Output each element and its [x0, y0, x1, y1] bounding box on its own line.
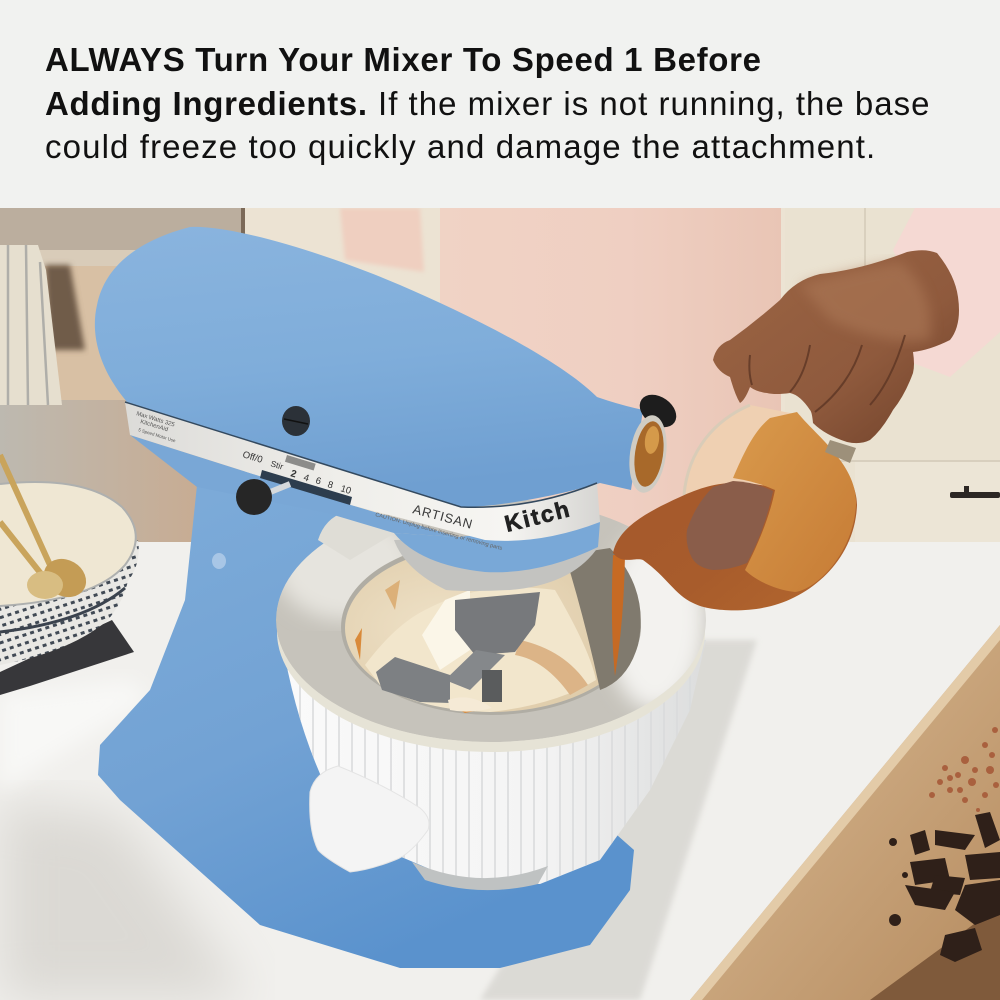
ice cream	[355, 580, 596, 713]
band text: speed labels: 10	[339, 483, 352, 497]
lower bowl	[0, 565, 129, 665]
instruction text	[45, 41, 930, 165]
kitchen background	[0, 208, 1000, 548]
gold spoons	[0, 455, 50, 575]
mixer planetary hub	[394, 522, 600, 591]
lock knob	[282, 406, 310, 436]
instruction text: Adding Ingredients. If the mixer is not running, the base	[45, 84, 930, 122]
caramel fill	[613, 420, 857, 610]
amber portion	[733, 412, 856, 592]
glass body	[684, 405, 850, 540]
rim shoulder behind the mixer head	[318, 512, 400, 560]
band text: capacity: KitchenAid	[139, 419, 169, 433]
band text: speed labels: 8	[326, 479, 334, 491]
glass spout ring	[825, 440, 856, 463]
person shirt	[340, 208, 781, 545]
band text: Artisan: ARTISAN	[411, 501, 475, 532]
band text: speed labels: 2	[289, 468, 298, 481]
chopped nuts	[929, 727, 999, 812]
slot for speed lever	[260, 470, 352, 505]
dark reflection	[687, 481, 773, 570]
bowl rim	[275, 498, 706, 752]
counter	[0, 542, 1000, 1000]
speed lever	[236, 479, 290, 515]
band text: capacity: 5 Speed Motor Use	[138, 427, 177, 443]
mat	[0, 620, 134, 695]
caramel stream	[612, 555, 625, 676]
header panel	[0, 0, 1000, 208]
mixer head	[95, 227, 643, 537]
towel	[0, 245, 62, 405]
band text: speed labels: 4	[302, 472, 310, 484]
speed control band	[125, 402, 600, 552]
mixer base	[98, 485, 634, 968]
instruction text: could freeze too quickly and damage the attachment.	[45, 128, 876, 165]
cutting board	[690, 625, 1000, 1000]
pitcher of caramel	[613, 405, 857, 610]
upper bowl	[0, 540, 139, 632]
mixer hub cap	[625, 388, 682, 495]
band text: speed labels: Off/0	[241, 449, 264, 466]
instruction text: ALWAYS Turn Your Mixer To Speed 1 Before	[45, 41, 762, 78]
dishes and spoons	[0, 455, 139, 695]
band text: caution: CAUTION: Unplug before inserting or removing parts	[374, 512, 503, 552]
ice cream bowl	[282, 640, 706, 890]
band text: capacity	[135, 411, 177, 443]
band text: capacity: Max Watts 325	[135, 411, 176, 429]
sleeve	[893, 208, 1000, 377]
band text: brand: Kitch	[502, 495, 574, 537]
bowl interior	[0, 482, 136, 606]
band text: speed labels: 6	[314, 475, 322, 487]
paddle	[376, 592, 540, 712]
photo: mixer with ice cream attachment	[0, 208, 1000, 1000]
band text: speed labels: Stir	[269, 458, 285, 472]
chopped chocolate	[889, 812, 1000, 962]
band text: speed labels	[241, 449, 352, 497]
hand	[713, 250, 959, 443]
bowl handle	[310, 766, 429, 872]
